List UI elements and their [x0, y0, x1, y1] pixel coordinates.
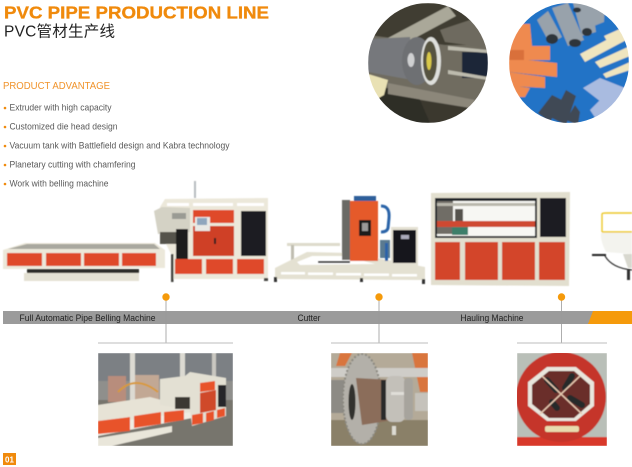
list: advantages: Vacuum tank with Battlefield design and Kabra technology — [10, 140, 230, 150]
photo: cutter saw blade — [331, 353, 428, 446]
timeline bar — [3, 311, 632, 324]
callout: cutter connector — [331, 293, 428, 343]
machine: vacuum tank (cropped) — [592, 213, 632, 280]
machine: cutter — [274, 196, 425, 284]
page number badge — [3, 453, 16, 465]
list: advantages: Customized die head design — [10, 122, 118, 132]
photo: coloured pipes — [509, 3, 630, 125]
page number badge: 01 — [5, 456, 14, 464]
photo: pipe socket — [368, 3, 488, 123]
machine: hauling machine — [431, 192, 570, 286]
photo: hauling machine caterpillar ring — [516, 352, 607, 446]
heading: product advantage: PRODUCT ADVANTAGE — [3, 81, 110, 92]
subtitle: PVC管材生产线 — [4, 22, 115, 40]
label: full automatic pipe belling machine: Full Automatic Pipe Belling Machine — [20, 313, 156, 323]
machine: full automatic pipe belling machine — [3, 181, 268, 282]
list: advantages — [4, 102, 230, 188]
list: advantages: Extruder with high capacity — [10, 102, 112, 112]
callout: belling machine connector — [98, 293, 233, 343]
list: advantages: Planetary cutting with chamfering — [10, 160, 136, 170]
title: PVC PIPE PRODUCTION LINE — [4, 2, 269, 22]
photo: belling machine in factory — [98, 353, 233, 446]
label: hauling machine: Hauling Machine — [460, 313, 524, 323]
callout: hauling machine connector — [517, 293, 607, 343]
label: cutter: Cutter — [298, 313, 321, 323]
list: advantages: Work with belling machine — [10, 178, 109, 188]
